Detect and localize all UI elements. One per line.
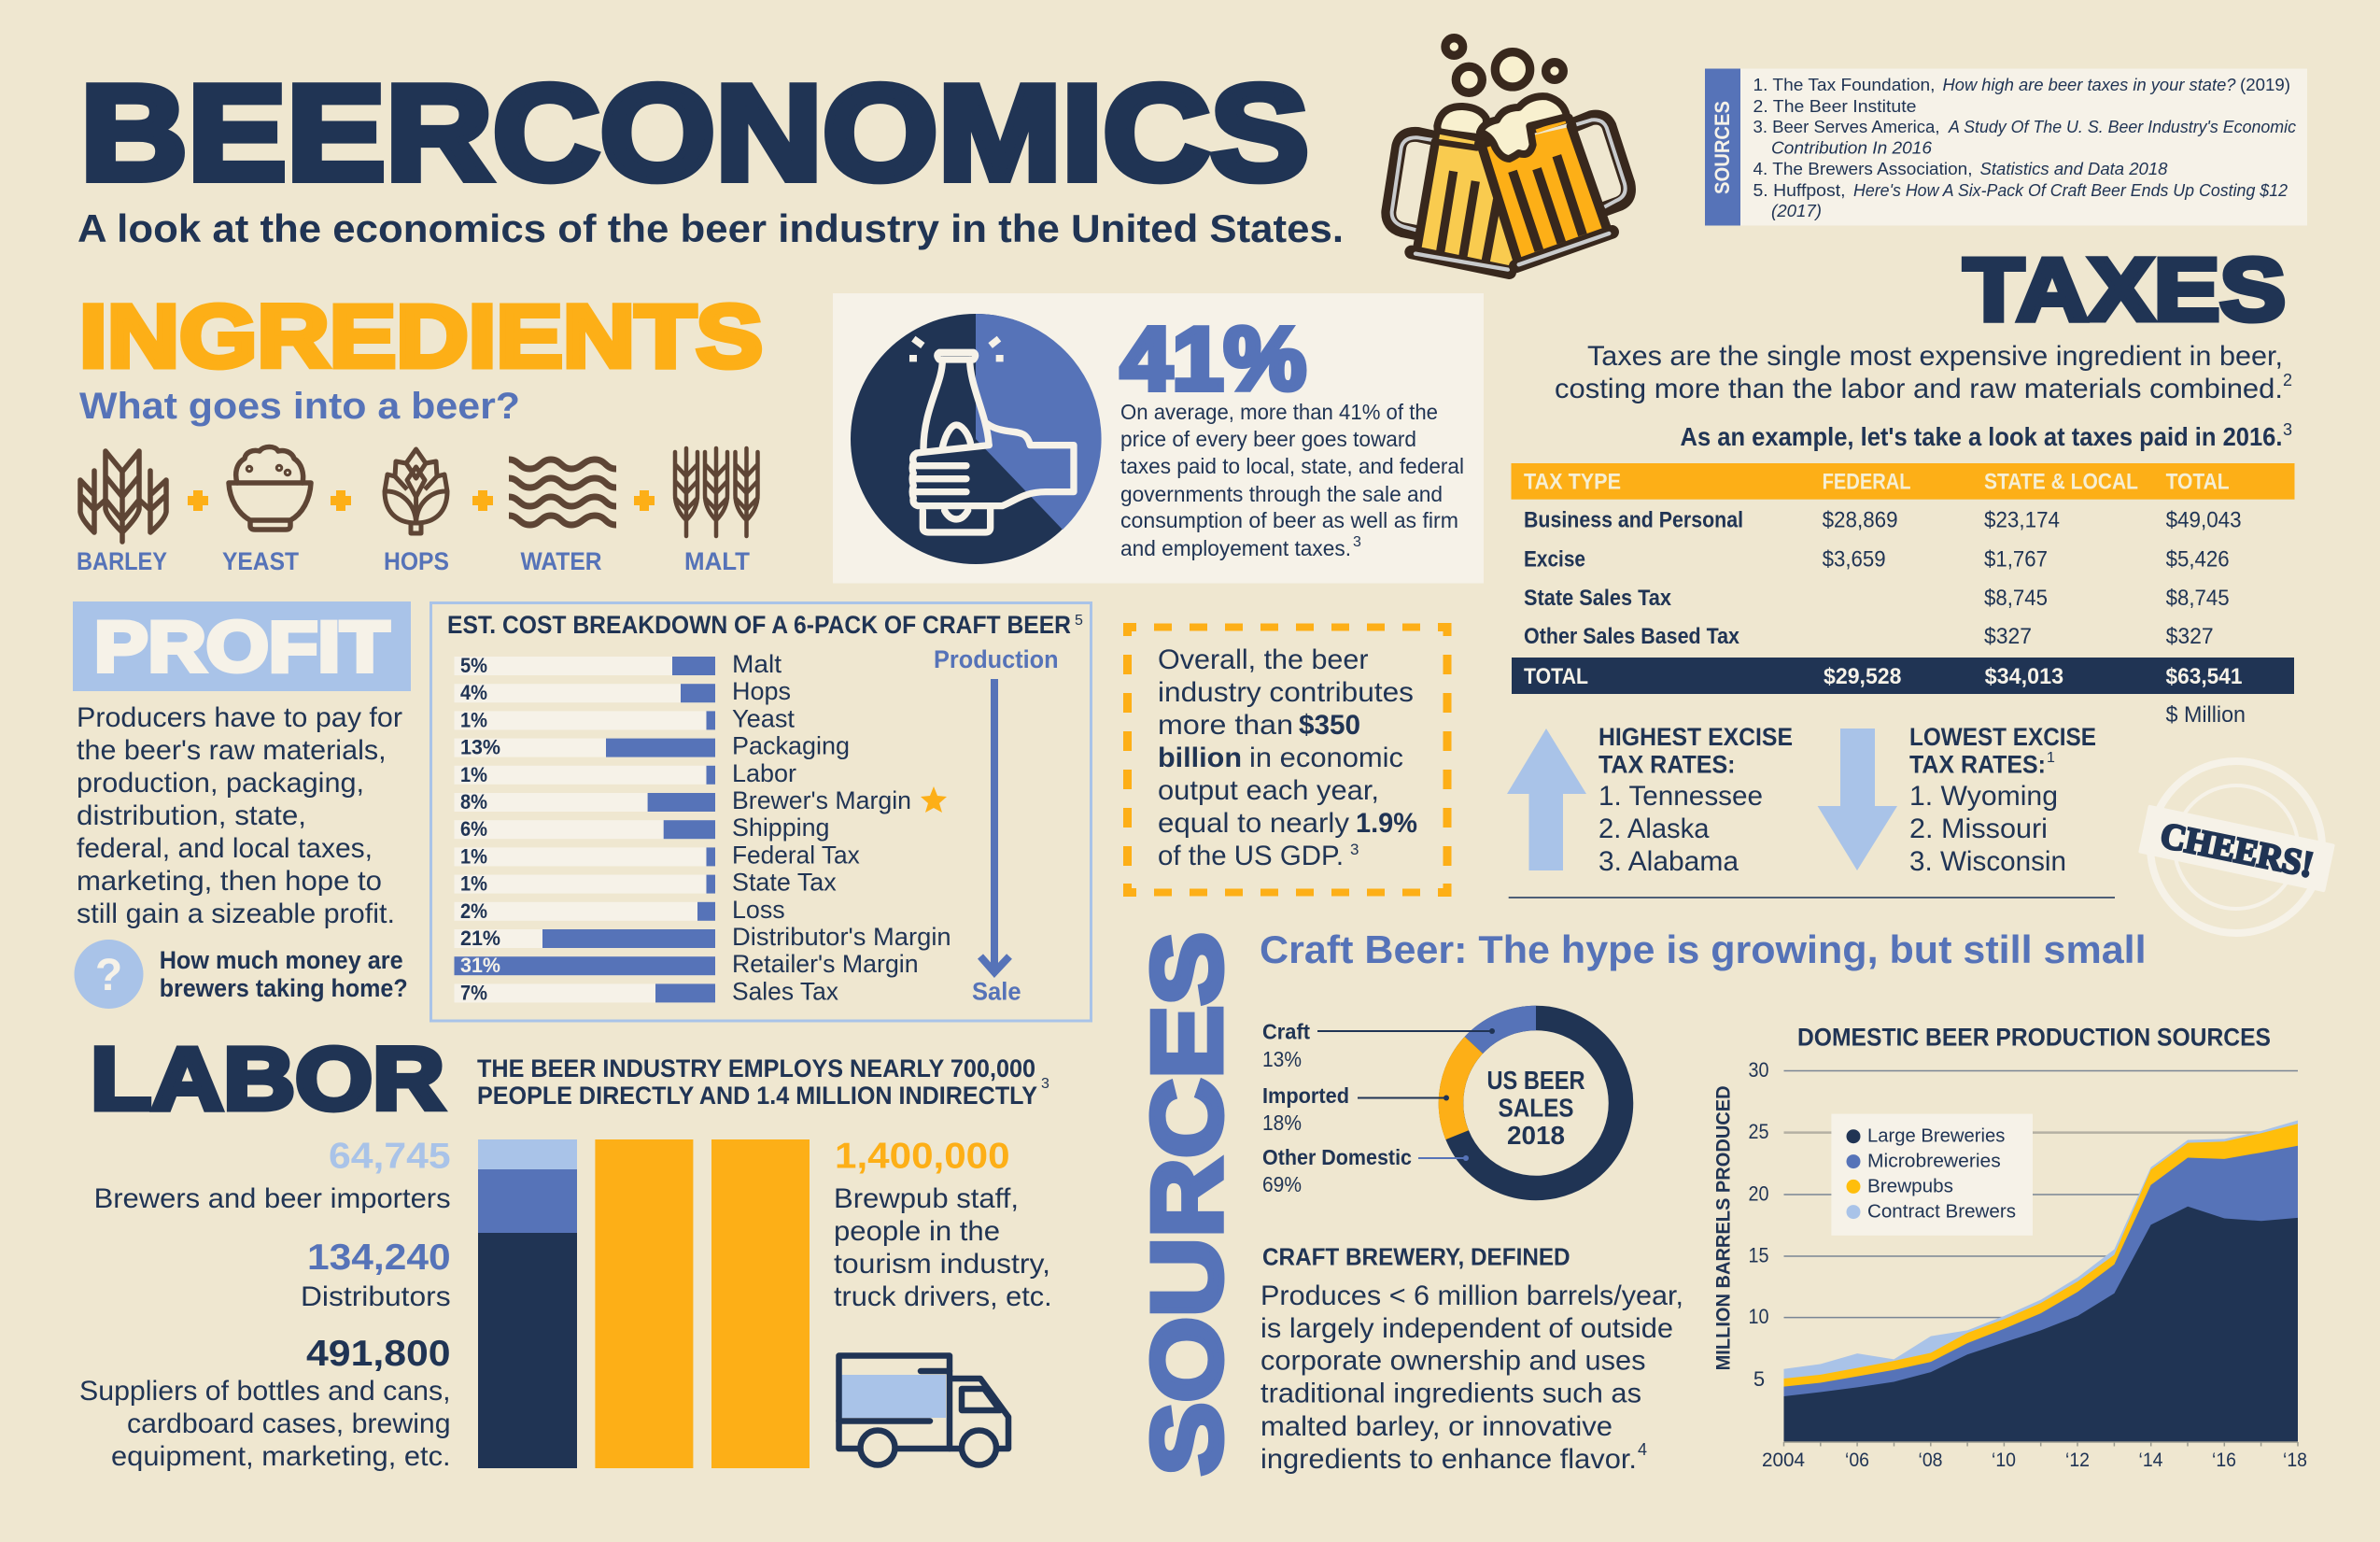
chart: US beer sales donut: SALES bbox=[1498, 1093, 1574, 1123]
text: craft brewery defined: ingredients to enhance flavor. bbox=[1260, 1444, 1637, 1475]
chart: domestic beer production area chart: ‘06 bbox=[1845, 1450, 1869, 1471]
profit text: distribution, state, bbox=[77, 800, 306, 831]
chart: US beer sales donut: 2018 bbox=[1507, 1121, 1565, 1150]
panel: cost breakdown bar chart: 8% bbox=[460, 790, 487, 813]
table: taxes paid in 2016: $3,659 bbox=[1823, 547, 1886, 572]
chart: domestic beer production area chart: 30 bbox=[1748, 1058, 1768, 1082]
table: taxes paid in 2016: $1,767 bbox=[1984, 547, 2048, 572]
panel: sources list: (2019) bbox=[2240, 75, 2290, 94]
panel: cost breakdown bar chart: 1% bbox=[460, 708, 487, 731]
highest excise tax rates text: 2. Alaska bbox=[1598, 813, 1710, 844]
panel: sources list: 5. Huffpost, bbox=[1753, 180, 1845, 200]
ingredient labels bbox=[77, 547, 750, 575]
icon: plus bbox=[188, 490, 208, 511]
panel: cost breakdown bar chart: 2% bbox=[460, 899, 487, 923]
arrow: up, highest excise bbox=[1507, 729, 1586, 870]
callout: economic output dashed box: output each year, bbox=[1158, 775, 1379, 806]
text: craft brewery defined: traditional ingredients such as bbox=[1260, 1379, 1641, 1409]
labor stat: distributors: 134,240 bbox=[307, 1238, 451, 1278]
panel: cost breakdown bar chart: 4% bbox=[460, 681, 487, 704]
labor subheading: THE BEER INDUSTRY EMPLOYS NEARLY 700,000 bbox=[477, 1054, 1035, 1082]
panel: cost breakdown bar chart: 1% bbox=[460, 763, 487, 786]
profit text: the beer's raw materials, bbox=[77, 735, 387, 766]
chart: domestic beer production area chart: 10 bbox=[1748, 1305, 1768, 1328]
labor stat: indirect bbox=[834, 1137, 1052, 1312]
stamp: cheers bbox=[2138, 761, 2335, 933]
callout: economic output dashed box: $350 bbox=[1299, 710, 1360, 741]
panel: cost breakdown bar chart: 21% bbox=[460, 927, 500, 950]
panel: cost breakdown bar chart: Labor bbox=[732, 759, 796, 787]
table: taxes paid in 2016: TOTAL bbox=[1524, 664, 1588, 689]
panel: cost breakdown bar chart: Loss bbox=[732, 896, 785, 924]
panel: profit heading bbox=[73, 601, 411, 691]
highest excise tax rates text: 3. Alabama bbox=[1598, 846, 1739, 877]
table: taxes paid in 2016: $5,426 bbox=[2166, 547, 2230, 572]
labor stat: indirect: 1,400,000 bbox=[835, 1137, 1010, 1177]
callout: economic output dashed box: in economic bbox=[1249, 743, 1403, 773]
bars: indirect jobs bbox=[595, 1139, 810, 1468]
panel: sources list: 1. The Tax Foundation, bbox=[1753, 75, 1935, 94]
table: taxes paid in 2016: $327 bbox=[2166, 624, 2214, 649]
chart: domestic beer production area chart: MILLION BARRELS PRODUCED bbox=[1712, 1085, 1735, 1370]
callout: economic output dashed box: equal to nearly bbox=[1158, 808, 1349, 839]
panel: cost breakdown bar chart: Yeast bbox=[732, 704, 795, 732]
table: taxes paid in 2016: STATE & LOCAL bbox=[1984, 470, 2138, 495]
panel: sources list: How high are beer taxes in your state? bbox=[1942, 75, 2236, 94]
chart: domestic beer production area chart: ‘16 bbox=[2212, 1450, 2236, 1471]
icon: malt bbox=[675, 448, 758, 536]
table: taxes paid in 2016: $ Million bbox=[2166, 702, 2246, 728]
table: taxes paid in 2016 bbox=[1511, 463, 2295, 728]
panel: sources list: Contribution In 2016 bbox=[1771, 138, 1933, 157]
labor stat: indirect: Brewpub staff, bbox=[834, 1183, 1019, 1214]
panel: profit heading: PROFIT bbox=[94, 607, 389, 687]
lowest excise tax rates text: LOWEST EXCISE bbox=[1909, 723, 2096, 751]
taxes intro text: 2 bbox=[2283, 371, 2292, 389]
table: taxes paid in 2016: TAX TYPE bbox=[1524, 470, 1621, 495]
icon: clinking beer mugs bbox=[1388, 38, 1628, 273]
panel: cost breakdown bar chart: 13% bbox=[460, 736, 500, 759]
labor stat: indirect: tourism industry, bbox=[834, 1249, 1050, 1280]
profit text: production, packaging, bbox=[77, 768, 364, 799]
panel: 41 percent callout: 3 bbox=[1353, 534, 1361, 550]
table: taxes paid in 2016: $34,013 bbox=[1985, 664, 2063, 689]
highest excise tax rates text: TAX RATES: bbox=[1598, 751, 1735, 779]
panel: cost breakdown bar chart: Malt bbox=[732, 650, 782, 678]
panel: cost breakdown bar chart: Sale bbox=[972, 978, 1021, 1006]
text: craft brewery defined: Produces < 6 million barrels/year, bbox=[1260, 1280, 1683, 1311]
subheading: what goes into a beer: What goes into a beer? bbox=[79, 386, 520, 427]
panel: 41 percent callout bbox=[833, 293, 1484, 583]
chart: US beer sales donut: Craft bbox=[1262, 1020, 1310, 1044]
stamp: cheers: CHEERS! bbox=[2157, 815, 2317, 885]
chart: domestic beer production area chart: Large Breweries bbox=[1867, 1125, 2005, 1147]
callout: economic output dashed box: Overall, the beer bbox=[1158, 644, 1369, 675]
profit text: marketing, then hope to bbox=[77, 866, 382, 897]
lowest excise tax rates text: 1. Wyoming bbox=[1909, 781, 2058, 812]
icon: question mark bbox=[75, 940, 144, 1009]
ingredient labels: WATER bbox=[521, 547, 601, 575]
chart: US beer sales donut: 13% bbox=[1262, 1047, 1302, 1071]
chart: US beer sales donut: Imported bbox=[1262, 1083, 1349, 1108]
panel: cost breakdown bar chart: Federal Tax bbox=[732, 841, 860, 869]
panel: cost breakdown bar chart bbox=[431, 603, 1091, 1021]
icon: barley bbox=[80, 451, 166, 542]
ingredient labels: YEAST bbox=[222, 547, 299, 575]
panel: cost breakdown bar chart: Production bbox=[934, 645, 1059, 673]
chart: domestic beer production area chart: 5 bbox=[1753, 1367, 1765, 1391]
labor stat: brewers: Brewers and beer importers bbox=[94, 1183, 451, 1214]
ingredient labels: MALT bbox=[684, 547, 750, 575]
panel: cost breakdown bar chart: Sales Tax bbox=[732, 977, 838, 1005]
icon: truck bbox=[838, 1356, 1008, 1464]
chart: domestic beer production area chart: Contract Brewers bbox=[1867, 1201, 2016, 1222]
chart: domestic beer production area chart: ‘18 bbox=[2283, 1450, 2307, 1471]
callout: economic output dashed box: of the US GDP. bbox=[1158, 841, 1344, 871]
labor stat: suppliers: equipment, marketing, etc. bbox=[111, 1441, 451, 1472]
labor stat: suppliers: 491,800 bbox=[306, 1334, 451, 1374]
table: taxes paid in 2016: $327 bbox=[1984, 624, 2032, 649]
heading: sources vertical: SOURCES bbox=[1132, 932, 1242, 1476]
chart: US beer sales donut: 18% bbox=[1262, 1111, 1302, 1135]
panel: sources list: Statistics and Data 2018 bbox=[1979, 159, 2168, 178]
table: taxes paid in 2016: $8,745 bbox=[1984, 586, 2048, 611]
panel: cost breakdown bar chart: 1% bbox=[460, 844, 487, 868]
lowest excise tax rates text bbox=[1909, 723, 2096, 877]
callout: economic output dashed box: more than bbox=[1158, 710, 1293, 741]
icon: plus bbox=[331, 490, 351, 511]
profit text: Producers have to pay for bbox=[77, 702, 402, 733]
highest excise tax rates text: HIGHEST EXCISE bbox=[1598, 723, 1793, 751]
ingredient labels: HOPS bbox=[384, 547, 449, 575]
lowest excise tax rates text: 1 bbox=[2047, 750, 2055, 766]
callout: economic output dashed box: 3 bbox=[1350, 841, 1359, 858]
highest excise tax rates text bbox=[1598, 723, 1793, 877]
table: taxes paid in 2016: Business and Personal bbox=[1524, 508, 1743, 532]
icon: yeast bowl bbox=[229, 446, 311, 530]
table: taxes paid in 2016: TOTAL bbox=[2166, 470, 2230, 495]
chart: US beer sales donut: Other Domestic bbox=[1262, 1145, 1412, 1169]
panel: 41 percent callout: taxes paid to local, state, and federal bbox=[1120, 454, 1464, 478]
table: taxes paid in 2016: Other Sales Based Tax bbox=[1524, 624, 1740, 649]
callout: economic output dashed box: 1.9% bbox=[1356, 808, 1417, 839]
profit text: still gain a sizeable profit. bbox=[77, 898, 395, 929]
lowest excise tax rates text: 2. Missouri bbox=[1909, 813, 2048, 844]
chart: US beer sales donut bbox=[1262, 1018, 1621, 1196]
panel: sources list: 4. The Brewers Association, bbox=[1753, 159, 1972, 178]
panel: cost breakdown bar chart: EST. COST BREAKDOWN OF A 6-PACK OF CRAFT BEER bbox=[447, 611, 1071, 639]
chart: US beer sales donut: US BEER bbox=[1486, 1066, 1585, 1095]
table: taxes paid in 2016: State Sales Tax bbox=[1524, 586, 1672, 611]
icon: plus bbox=[634, 490, 655, 511]
text: craft brewery defined: 4 bbox=[1638, 1440, 1647, 1459]
chart: US beer sales donut: 69% bbox=[1262, 1172, 1302, 1196]
labor stat: brewers: 64,745 bbox=[329, 1137, 451, 1177]
text: craft brewery defined: corporate ownership and uses bbox=[1260, 1345, 1645, 1377]
heading: taxes: TAXES bbox=[1964, 241, 2286, 340]
taxes intro text: Taxes are the single most expensive ingredient in beer, bbox=[1587, 341, 2283, 372]
icon: question mark: ? bbox=[95, 951, 122, 1000]
icon: water waves bbox=[509, 460, 616, 525]
question text: How much money are bbox=[160, 946, 403, 974]
taxes intro text: 3 bbox=[2283, 420, 2292, 439]
highest excise tax rates text: 1. Tennessee bbox=[1598, 781, 1763, 812]
panel: 41 percent callout: and employement taxes. bbox=[1120, 536, 1351, 560]
profit text: federal, and local taxes, bbox=[77, 833, 373, 864]
panel: cost breakdown bar chart: 7% bbox=[460, 981, 487, 1004]
panel: cost breakdown bar chart: Hops bbox=[732, 677, 791, 705]
chart: domestic beer production area chart: ‘08 bbox=[1918, 1450, 1942, 1471]
panel: sources list: A Study Of The U. S. Beer Industry's Economic bbox=[1948, 117, 2297, 136]
panel: cost breakdown bar chart: Brewer's Margin bbox=[732, 786, 911, 814]
panel: sources list: SOURCES bbox=[1711, 101, 1734, 194]
labor stat: brewers bbox=[94, 1137, 451, 1214]
taxes intro text: costing more than the labor and raw materials combined. bbox=[1555, 374, 2283, 404]
heading: ingredients: INGREDIENTS bbox=[79, 288, 763, 387]
labor stat: indirect: people in the bbox=[834, 1216, 1000, 1247]
panel: cost breakdown bar chart: 6% bbox=[460, 817, 487, 841]
lowest excise tax rates text: 3. Wisconsin bbox=[1909, 846, 2066, 877]
chart: domestic beer production area chart: DOMESTIC BEER PRODUCTION SOURCES bbox=[1797, 1024, 2271, 1052]
labor subheading bbox=[477, 1054, 1049, 1110]
chart: domestic beer production area chart: 20 bbox=[1748, 1182, 1768, 1205]
icon: hops bbox=[385, 449, 447, 533]
text: craft brewery defined bbox=[1260, 1243, 1683, 1475]
panel: 41 percent callout: governments through the sale and bbox=[1120, 482, 1443, 506]
icon: plus bbox=[472, 490, 493, 511]
labor stat: suppliers bbox=[79, 1334, 451, 1472]
callout: economic output dashed box: industry contributes bbox=[1158, 677, 1414, 708]
chart: domestic beer production area chart: 2004 bbox=[1762, 1450, 1805, 1471]
text: craft brewery defined: is largely independent of outside bbox=[1260, 1313, 1673, 1344]
title: BEERCONOMICS bbox=[80, 57, 1309, 208]
panel: cost breakdown bar chart: 5% bbox=[460, 654, 487, 677]
panel: 41 percent callout: On average, more than 41% of the bbox=[1120, 400, 1438, 424]
panel: 41 percent callout: price of every beer goes toward bbox=[1120, 427, 1416, 451]
panel: cost breakdown bar chart: Shipping bbox=[732, 813, 829, 842]
heading: labor: LABOR bbox=[91, 1029, 444, 1128]
chart: domestic beer production area chart: 25 bbox=[1748, 1120, 1768, 1143]
table: taxes paid in 2016: $8,745 bbox=[2166, 586, 2230, 611]
callout: economic output dashed box: billion bbox=[1158, 743, 1242, 773]
ingredient labels: BARLEY bbox=[77, 547, 167, 575]
panel: sources list bbox=[1705, 69, 2307, 226]
panel: cost breakdown bar chart: 31% bbox=[460, 954, 500, 977]
arrow: down, lowest excise bbox=[1818, 729, 1897, 870]
subtitle: A look at the economics of the beer industry in the United States. bbox=[77, 206, 1344, 250]
chart: domestic beer production area chart: Microbreweries bbox=[1867, 1151, 2001, 1171]
chart: domestic beer production area chart: Brewpubs bbox=[1867, 1175, 1953, 1197]
labor subheading: 3 bbox=[1041, 1076, 1049, 1092]
panel: sources list: 2. The Beer Institute bbox=[1753, 96, 1916, 116]
table: taxes paid in 2016: $49,043 bbox=[2166, 508, 2242, 532]
labor stat: suppliers: Suppliers of bottles and cans, bbox=[79, 1376, 451, 1407]
text: craft brewery defined: CRAFT BREWERY, DEFINED bbox=[1262, 1243, 1570, 1271]
table: taxes paid in 2016: $29,528 bbox=[1824, 664, 1901, 689]
labor subheading: PEOPLE DIRECTLY AND 1.4 MILLION INDIRECTLY bbox=[477, 1082, 1037, 1110]
table: taxes paid in 2016: FEDERAL bbox=[1823, 470, 1911, 495]
taxes intro text bbox=[1555, 341, 2292, 451]
labor stat: suppliers: cardboard cases, brewing bbox=[127, 1408, 451, 1439]
taxes intro text: As an example, let's take a look at taxes paid in 2016. bbox=[1681, 422, 2282, 451]
panel: sources list: 3. Beer Serves America, bbox=[1753, 117, 1940, 136]
panel: sources list: Here's How A Six-Pack Of Craft Beer Ends Up Costing $12 bbox=[1853, 180, 2288, 200]
heading: craft beer: Craft Beer: The hype is growing, but still small bbox=[1260, 927, 2147, 971]
table: taxes paid in 2016: Excise bbox=[1524, 547, 1585, 572]
panel: cost breakdown bar chart: 1% bbox=[460, 872, 487, 896]
labor stat: distributors bbox=[301, 1238, 451, 1312]
panel: sources list: (2017) bbox=[1771, 201, 1822, 220]
stacked bar: direct jobs bbox=[478, 1139, 577, 1468]
chart: domestic beer production area chart: ‘10 bbox=[1992, 1450, 2016, 1471]
panel: cost breakdown bar chart: State Tax bbox=[732, 869, 837, 897]
lowest excise tax rates text: TAX RATES: bbox=[1909, 751, 2046, 779]
text: craft brewery defined: malted barley, or innovative bbox=[1260, 1411, 1612, 1442]
question text: brewers taking home? bbox=[160, 974, 408, 1002]
panel: cost breakdown bar chart: Retailer's Margin bbox=[732, 950, 919, 978]
question text bbox=[160, 946, 408, 1002]
chart: domestic beer production area chart: 15 bbox=[1748, 1244, 1768, 1266]
labor stat: distributors: Distributors bbox=[301, 1281, 451, 1312]
panel: cost breakdown bar chart: Packaging bbox=[732, 732, 850, 760]
callout: economic output dashed box bbox=[1128, 628, 1447, 893]
panel: cost breakdown bar chart: Distributor's Margin bbox=[732, 923, 951, 951]
profit text bbox=[77, 702, 402, 929]
table: taxes paid in 2016: $28,869 bbox=[1823, 508, 1898, 532]
chart: domestic beer production area chart bbox=[1712, 1024, 2307, 1471]
table: taxes paid in 2016: $23,174 bbox=[1984, 508, 2060, 532]
table: taxes paid in 2016: $63,541 bbox=[2166, 664, 2243, 689]
panel: 41 percent callout: 41% bbox=[1120, 309, 1306, 409]
panel: cost breakdown bar chart: 5 bbox=[1075, 613, 1083, 629]
chart: domestic beer production area chart: ‘14 bbox=[2138, 1450, 2163, 1471]
panel: 41 percent callout: consumption of beer as well as firm bbox=[1120, 508, 1458, 532]
chart: domestic beer production area chart: ‘12 bbox=[2065, 1450, 2090, 1471]
labor stat: indirect: truck drivers, etc. bbox=[834, 1281, 1052, 1312]
